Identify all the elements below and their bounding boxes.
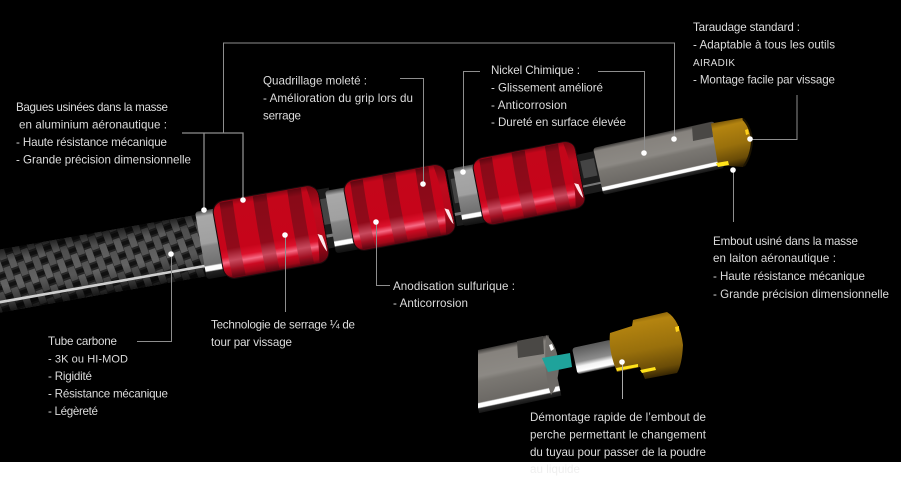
body opening bbox=[545, 335, 559, 395]
white bottom strip bbox=[0, 462, 901, 484]
text: embout usiné: en laiton aéronautique : bbox=[713, 252, 836, 265]
text: nickel chimique bbox=[491, 64, 626, 129]
brass section bbox=[610, 312, 683, 379]
main assembled pole illustration bbox=[0, 118, 752, 315]
text: démontage rapide bbox=[530, 411, 707, 476]
text: technologie de serrage bbox=[211, 318, 355, 349]
leader dots bbox=[168, 136, 753, 365]
text: tube carbone: - Légèreté bbox=[48, 405, 98, 418]
text: tube carbone: - Résistance mécanique bbox=[48, 388, 168, 400]
text: démontage rapide: perche permettant le changement bbox=[530, 428, 707, 442]
text: bagues usinées: en aluminium aéronautique : bbox=[19, 118, 167, 132]
opening highlight bbox=[549, 344, 554, 351]
text: anodisation sulfurique: - Anticorrosion bbox=[393, 297, 468, 310]
text: quadrillage moleté: serrage bbox=[263, 110, 301, 122]
text: technologie de serrage: tour par vissage bbox=[211, 336, 292, 349]
teal connector bbox=[542, 353, 572, 372]
yellow highlights bbox=[616, 364, 638, 371]
text: bagues usinées: - Grande précision dimensionnelle bbox=[16, 154, 191, 166]
brass tip bbox=[711, 118, 752, 167]
text: bagues usinées: - Haute résistance mécanique bbox=[16, 136, 167, 149]
carbon tube bbox=[0, 213, 217, 315]
aluminium ring 2 bbox=[325, 186, 362, 253]
text: nickel chimique: - Glissement amélioré bbox=[491, 82, 603, 94]
text: taraudage standard: AIRADIK bbox=[693, 58, 735, 69]
text: quadrillage moleté: Quadrillage moleté : bbox=[263, 74, 367, 88]
grey body section bbox=[478, 335, 562, 413]
text: tube carbone: - Rigidité bbox=[48, 370, 92, 383]
dark gap before body bbox=[576, 151, 604, 195]
text: nickel chimique: Nickel Chimique : bbox=[491, 64, 580, 77]
body notch bbox=[517, 336, 544, 358]
text: bagues usinées: Bagues usinées dans la masse bbox=[16, 101, 168, 114]
text: tube carbone: - 3K ou HI-MOD bbox=[48, 354, 128, 366]
red collar 2 bbox=[342, 162, 457, 253]
text: embout usiné bbox=[713, 235, 889, 301]
text: taraudage standard bbox=[693, 21, 835, 86]
text: embout usiné: - Grande précision dimensionnelle bbox=[713, 288, 889, 301]
red collar 1 bbox=[211, 183, 331, 281]
carbon gap 1 bbox=[315, 188, 339, 249]
threaded grey body bbox=[593, 121, 724, 195]
red collar 3 bbox=[471, 139, 587, 227]
text: embout usiné: Embout usiné dans la masse bbox=[713, 235, 858, 248]
text: anodisation sulfurique: Anodisation sulfurique : bbox=[393, 280, 515, 293]
aluminium ring 3 bbox=[453, 164, 488, 226]
text: démontage rapide: du tuyau pour passer de la poudre bbox=[530, 446, 706, 459]
leader lines bbox=[137, 43, 797, 399]
text: bagues usinées bbox=[16, 101, 191, 166]
text: embout usiné: - Haute résistance mécanique bbox=[713, 270, 865, 283]
text: démontage rapide: au liquide bbox=[530, 463, 580, 476]
carbon gap 2 bbox=[447, 168, 471, 226]
text: anodisation sulfurique bbox=[393, 280, 515, 310]
aluminium ring 1 bbox=[195, 207, 233, 279]
text: quadrillage moleté: - Amélioration du grip lors du bbox=[263, 92, 413, 105]
text: nickel chimique: - Anticorrosion bbox=[491, 99, 567, 112]
body notch bbox=[692, 123, 713, 141]
text: taraudage standard: - Adaptable à tous les outils bbox=[693, 38, 835, 52]
silver cylinder bbox=[572, 340, 617, 374]
text: tube carbone bbox=[48, 335, 168, 418]
text: technologie de serrage: Technologie de serrage ¼ de bbox=[211, 318, 355, 332]
text: démontage rapide: Démontage rapide de l’embout de bbox=[530, 411, 706, 424]
text: quadrillage moleté bbox=[263, 74, 413, 122]
text: taraudage standard: Taraudage standard : bbox=[693, 21, 800, 34]
text: nickel chimique: - Dureté en surface élevée bbox=[491, 116, 626, 129]
text: taraudage standard: - Montage facile par vissage bbox=[693, 74, 835, 86]
text: tube carbone: Tube carbone bbox=[48, 335, 117, 348]
exploded tip illustration bbox=[466, 312, 683, 413]
